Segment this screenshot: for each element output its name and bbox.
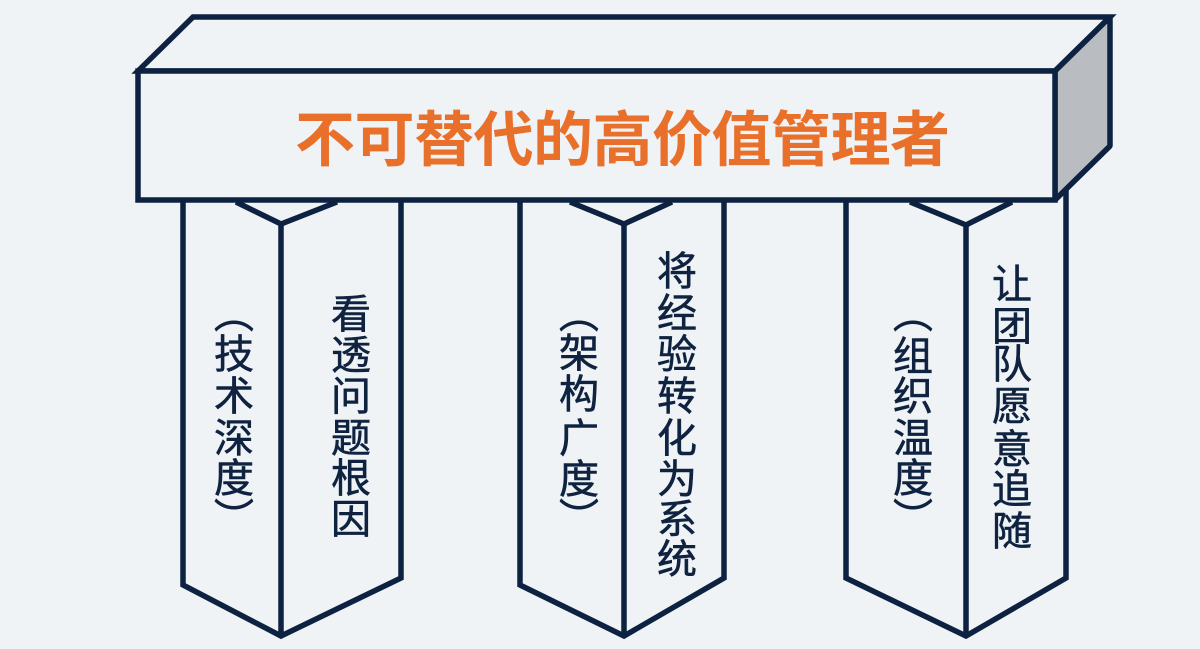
beam front face: [138, 71, 1055, 200]
pillar 1 label: technical depth: ）: [210, 497, 254, 537]
pillar 1 label: technical depth: （: [210, 293, 254, 333]
pillar 1: technical depth: [183, 195, 401, 636]
pillar 2 label: architecture breadth: （: [555, 293, 599, 333]
pillar 2 label: architecture breadth: 架构广度: [559, 332, 599, 502]
pillar 3 label: organizational warmth: ）: [889, 497, 933, 537]
pillar 3 label: organizational warmth: （: [889, 293, 933, 333]
pillar 3 statement: 让团队愿意追随: [992, 263, 1032, 554]
pillar 3: organizational warmth: [846, 190, 1066, 636]
title: 不可替代的高价值管理者: [295, 107, 950, 174]
pillar 2 label: architecture breadth: [555, 293, 599, 537]
beam side face: [1055, 17, 1110, 200]
beam top face: [138, 17, 1110, 71]
pillar 3 label: organizational warmth: 组织温度: [893, 335, 933, 501]
pillar 1 label: technical depth: [210, 293, 254, 537]
pillar 1 label: technical depth: 技术深度: [214, 333, 254, 501]
beam: 3D top slab: [138, 17, 1110, 200]
pillar 2 statement: 将经验转化为系统: [657, 250, 697, 582]
pillar 1 statement: 看透问题根因: [331, 293, 371, 542]
pillar 2: architecture breadth: [520, 195, 724, 636]
pillar 2 label: architecture breadth: ）: [555, 497, 599, 537]
pillar 3 label: organizational warmth: [889, 293, 933, 537]
